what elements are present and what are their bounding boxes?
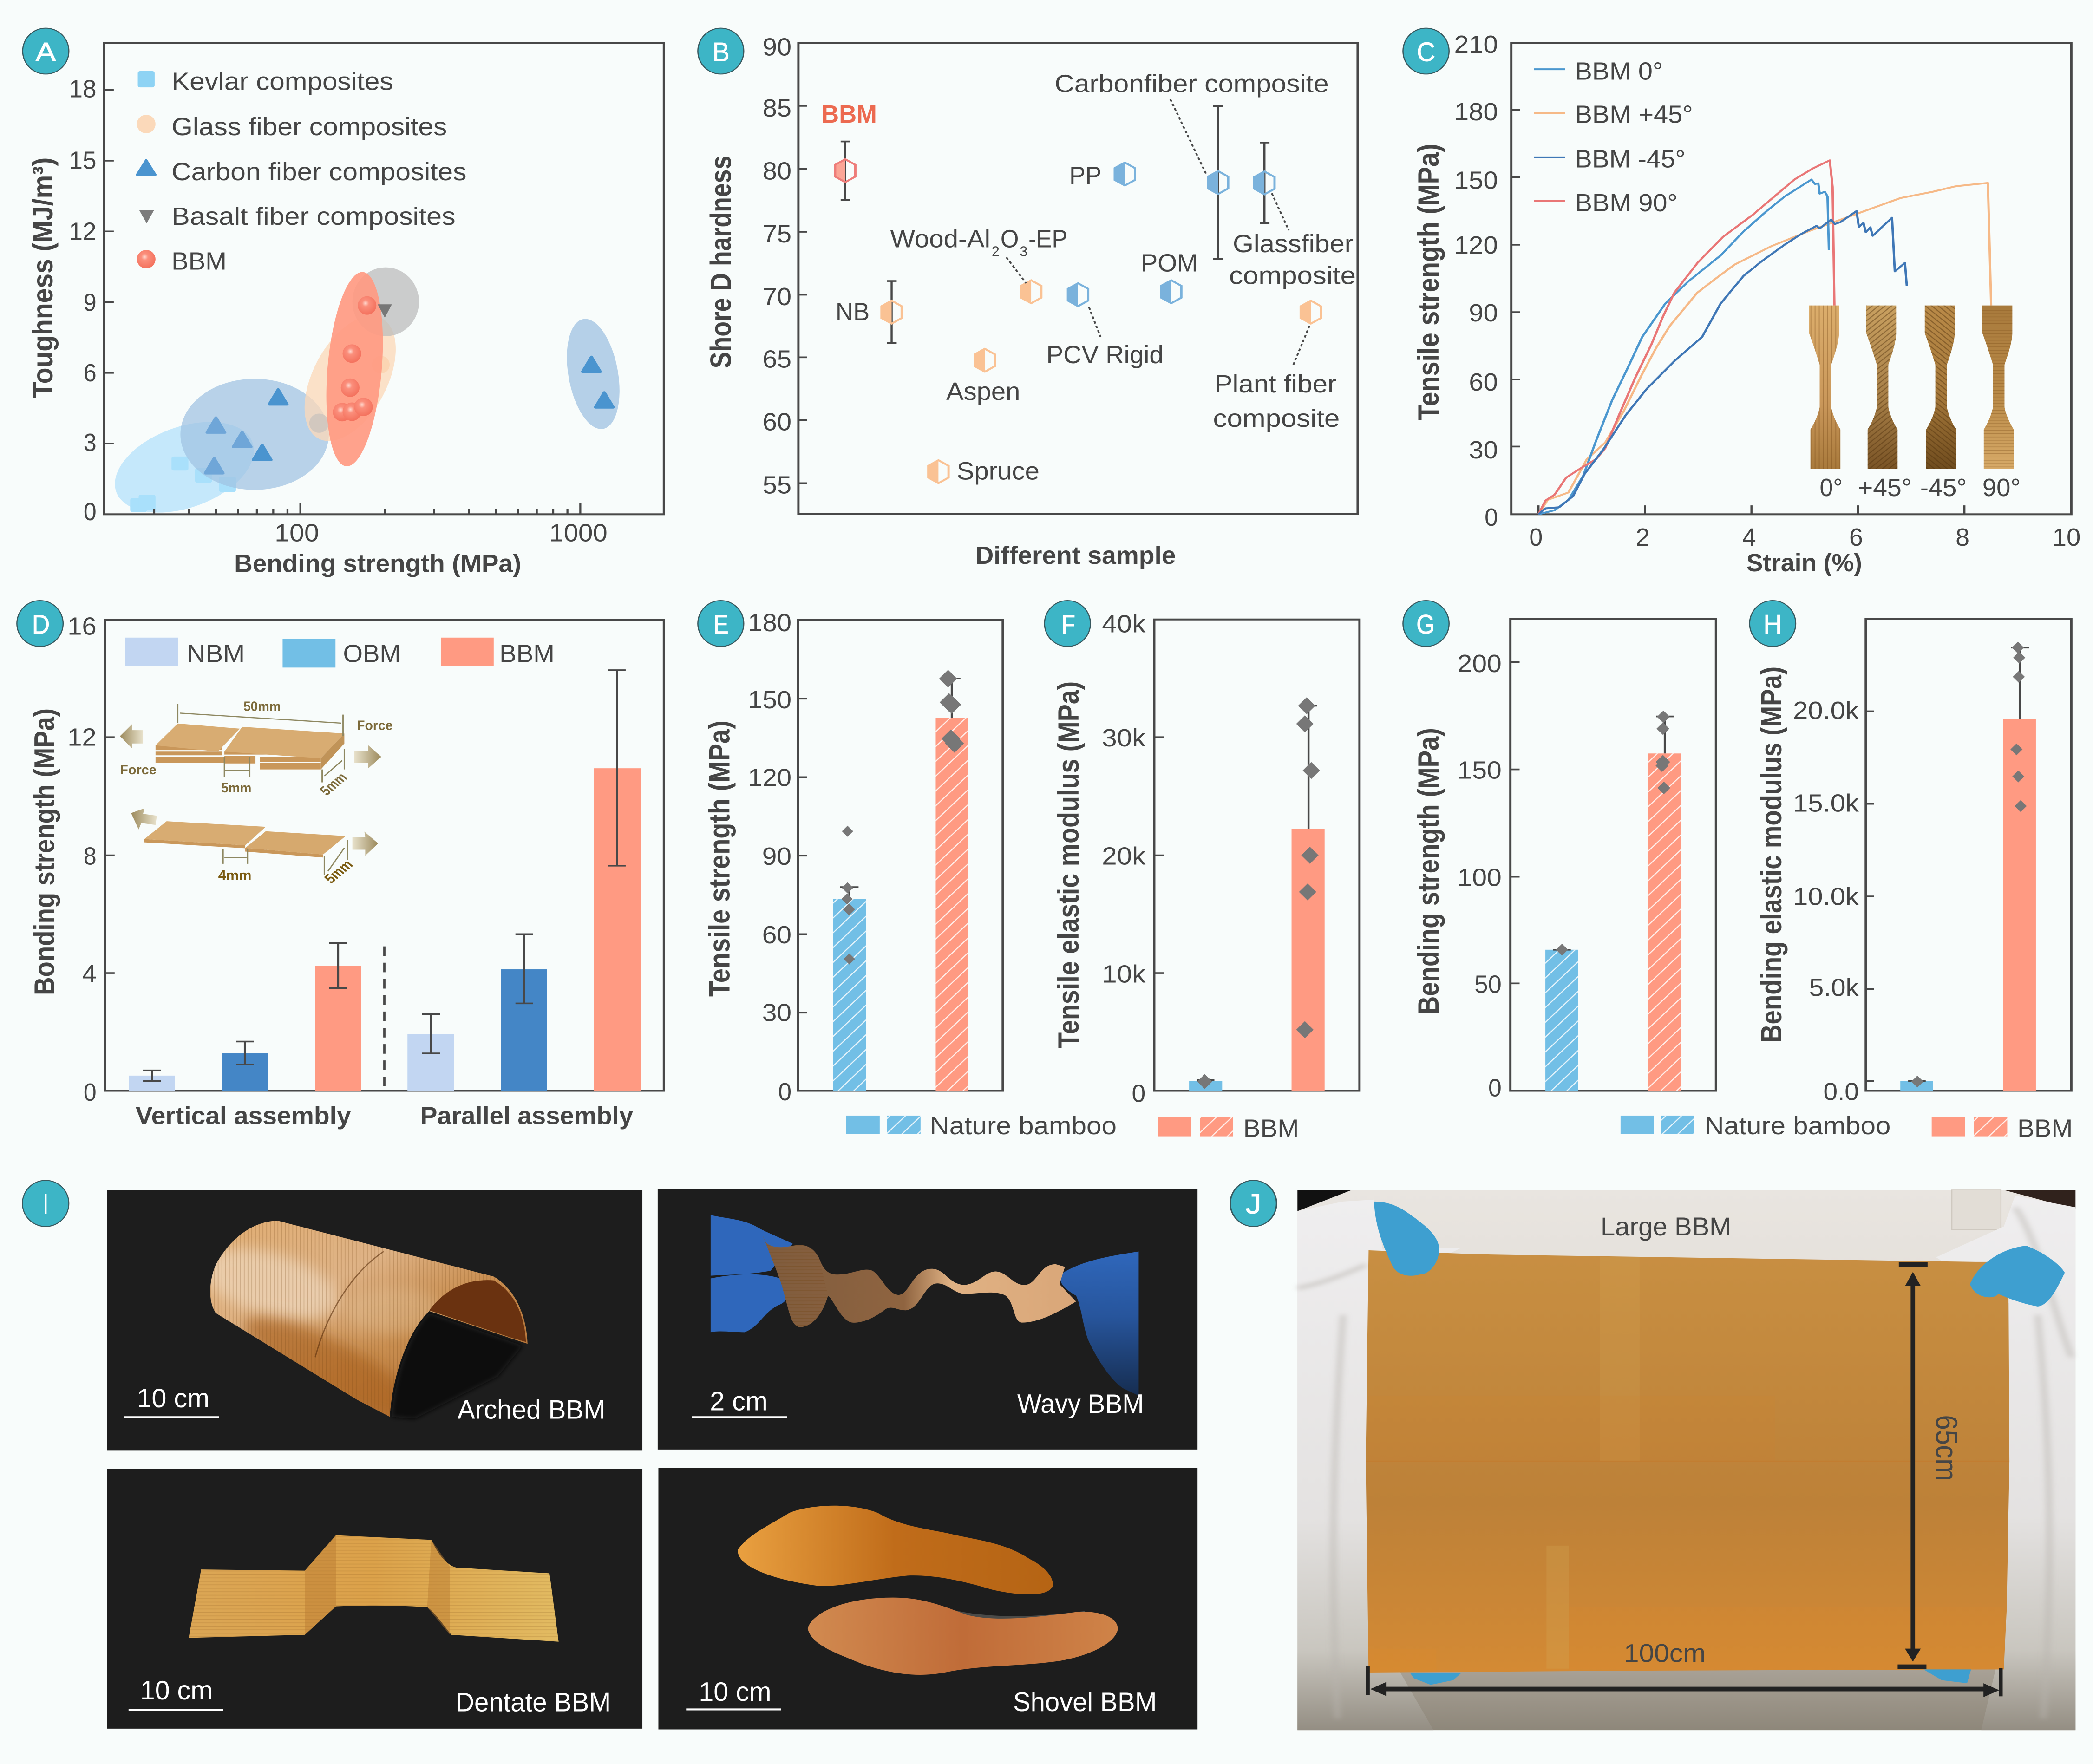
badge H: H <box>1763 609 1782 639</box>
legend: BBM -45° <box>1575 145 1686 173</box>
sample labels: 3 <box>1020 244 1027 260</box>
y tick labels: 10k <box>1102 960 1146 988</box>
badge J <box>1230 1180 1276 1227</box>
photo: wavy BBM <box>658 1189 1197 1450</box>
badge H <box>1750 601 1796 647</box>
x tick labels: 6 <box>1849 523 1863 551</box>
sample labels: BBM <box>821 100 877 128</box>
panel D: bonding strength <box>17 601 664 1130</box>
legend: BBM 90° <box>1575 189 1678 217</box>
y tick labels: 8 <box>84 842 97 870</box>
axes frame <box>105 620 664 1091</box>
error bars <box>1553 717 1674 950</box>
y tick labels: 120 <box>1454 231 1498 259</box>
badge G: G <box>1416 609 1435 639</box>
photo background with lab coats <box>1297 1190 2075 1730</box>
panel B: Shore D hardness <box>698 28 1358 569</box>
y tick labels <box>1793 696 1859 1105</box>
bamboo sheet <box>1366 1250 2009 1673</box>
inset: single layer joint diagram: 4mm <box>218 868 251 882</box>
y tick labels: 5.0k <box>1809 973 1859 1001</box>
label: large BBM: Large BBM <box>1601 1212 1731 1241</box>
curve: BBM 90 <box>1538 160 1834 514</box>
sample labels: -EP <box>1028 225 1067 253</box>
error bars <box>841 106 1269 343</box>
legend: BBM <box>499 640 555 667</box>
y tick labels: 15.0k <box>1793 789 1859 817</box>
error bars <box>1197 706 1317 1080</box>
legend for panels E and F: Nature bamboo <box>930 1112 1117 1139</box>
curve: BBM 0 <box>1538 180 1829 514</box>
label: wavy BBM: Wavy BBM <box>1017 1389 1144 1419</box>
axes frame <box>1511 619 1716 1091</box>
axes frame <box>1154 620 1360 1091</box>
photo: dentate BBM <box>107 1469 642 1729</box>
y tick labels: 10.0k <box>1793 882 1859 910</box>
y tick labels: 80 <box>763 157 791 185</box>
specimen photos <box>1809 306 2014 469</box>
y tick labels: 180 <box>1454 98 1498 126</box>
y tick labels: 90 <box>762 843 791 870</box>
badge C <box>1403 28 1449 74</box>
legend: Carbon fiber composites <box>171 158 466 186</box>
y axis ticks <box>798 106 807 483</box>
data hexagons <box>835 159 1321 483</box>
y tick labels: 18 <box>69 75 97 103</box>
y tick labels: 0 <box>1485 503 1498 531</box>
scale bar: 2 cm: 2 cm <box>710 1386 768 1417</box>
y tick labels: 40k <box>1102 610 1146 638</box>
inset: laminated joint diagram: Force <box>120 762 157 777</box>
y tick labels: 3 <box>84 429 97 457</box>
label: 100cm: 100cm <box>1624 1639 1706 1668</box>
y axis title: Tensile elastic modulus (MPa) <box>1053 681 1085 1048</box>
axes frame <box>798 620 1003 1091</box>
data points <box>842 670 964 965</box>
label: shovel BBM: Shovel BBM <box>1013 1687 1157 1717</box>
axis ticks <box>1511 110 1964 514</box>
y axis ticks <box>1511 662 1520 983</box>
inset: single layer joint diagram: 5mm <box>320 857 356 886</box>
panel G: bending strength bars <box>1403 601 1716 1102</box>
y tick labels: 100 <box>1458 863 1502 891</box>
y tick labels: 150 <box>748 686 791 714</box>
y tick labels: 4 <box>82 960 97 988</box>
legend: NBM <box>187 640 245 667</box>
data points <box>1911 642 2027 1087</box>
y tick labels: 150 <box>1454 166 1498 194</box>
group labels: Vertical assembly <box>136 1102 351 1130</box>
y tick labels: 30 <box>1469 436 1498 464</box>
y axis title: Bending strength (MPa) <box>1413 728 1445 1014</box>
y tick labels <box>748 609 791 1106</box>
curve: BBM +45 <box>1538 183 1991 514</box>
legend: BBM +45° <box>1575 100 1693 128</box>
y tick labels: 90 <box>1469 299 1498 327</box>
legend <box>125 638 555 667</box>
photo: shovel BBM <box>658 1468 1197 1730</box>
inset: single layer joint diagram <box>131 808 378 886</box>
y tick labels: 0.0 <box>1823 1078 1859 1105</box>
material ellipses and data points <box>96 268 627 531</box>
y tick labels: 60 <box>1469 368 1498 396</box>
y tick labels: 20.0k <box>1793 696 1859 725</box>
sample labels: POM <box>1141 249 1198 277</box>
y axis ticks <box>105 737 115 973</box>
sample labels <box>821 70 1356 485</box>
specimen labels <box>1820 474 2021 502</box>
badge I <box>22 1180 69 1227</box>
panel H: bending elastic modulus bars <box>1750 601 2071 1105</box>
panel I: wavy and shovel photos <box>658 1189 1197 1730</box>
y tick labels: 65 <box>763 346 791 373</box>
specimen labels: 0° <box>1820 474 1843 502</box>
y tick labels <box>67 612 97 1106</box>
y tick labels: 200 <box>1458 649 1502 677</box>
y tick labels: 15 <box>69 147 97 174</box>
legend: Kevlar composites <box>171 68 393 95</box>
legend: Glass fiber composites <box>171 113 447 141</box>
group labels: Parallel assembly <box>420 1102 633 1130</box>
y axis title: Bending elastic modulus (MPa) <box>1755 666 1788 1043</box>
panel A: toughness vs bending strength <box>23 28 664 577</box>
y tick labels: 20k <box>1102 843 1146 870</box>
y tick labels: 30 <box>762 999 791 1026</box>
sample labels: Spruce <box>957 457 1040 485</box>
y tick labels: 16 <box>67 612 97 640</box>
x tick labels: 2 <box>1636 523 1649 551</box>
group labels <box>136 1102 633 1130</box>
sample labels: composite <box>1213 405 1340 432</box>
dimension arrow: 100cm <box>1366 1666 2003 1697</box>
y tick labels: 0 <box>84 498 97 526</box>
panel E: tensile strength bars <box>698 601 1003 1106</box>
sample labels: PP <box>1069 162 1101 189</box>
badge B: B <box>713 37 730 67</box>
curve: BBM -45 <box>1538 211 1907 514</box>
y tick labels: 30k <box>1102 724 1146 752</box>
x tick labels: 100 <box>275 519 319 547</box>
y axis title: Tensile strength (MPa) <box>703 720 736 997</box>
x tick labels <box>1529 523 2080 551</box>
badge E: E <box>713 609 729 639</box>
y tick labels: 0 <box>1132 1080 1145 1107</box>
dashed separator <box>383 947 386 1091</box>
y axis title: Toughness (MJ/m³) <box>26 157 59 398</box>
x axis title: Different sample <box>975 542 1176 569</box>
hatched bars <box>833 718 968 1091</box>
y tick labels: 120 <box>748 764 791 791</box>
bars <box>129 768 641 1091</box>
data points <box>1556 711 1670 956</box>
error bars <box>143 670 626 1081</box>
y axis title: Bonding strength (MPa) <box>28 708 60 995</box>
scale bar: 10 cm: 10 cm <box>140 1675 213 1705</box>
error bars <box>1908 647 2029 1081</box>
y tick labels <box>69 75 97 526</box>
label: 65cm: 65cm <box>1929 1415 1964 1481</box>
panel C: tensile stress-strain curves <box>1403 28 2080 577</box>
y tick labels: 0 <box>778 1078 791 1106</box>
axes frame <box>1866 619 2071 1091</box>
bars <box>1189 829 1325 1091</box>
legend for panels E and F: BBM <box>1243 1114 1299 1142</box>
legend: BBM <box>171 247 227 275</box>
leader lines <box>1007 99 1309 365</box>
x tick labels: 0 <box>1529 523 1543 551</box>
dimension arrow: 65cm <box>1897 1262 1928 1669</box>
y tick labels: 6 <box>84 359 97 387</box>
sample labels: Wood-Al <box>890 225 990 253</box>
legend for panels G and H: Nature bamboo <box>1704 1111 1890 1139</box>
label: arched BBM: Arched BBM <box>458 1394 606 1424</box>
legend <box>137 68 466 275</box>
inset: laminated joint diagram: Force <box>357 718 393 733</box>
specimen labels: +45° <box>1858 474 1912 502</box>
x axis title: Strain (%) <box>1746 549 1862 577</box>
y tick labels: 150 <box>1458 756 1502 784</box>
sample labels: Carbonfiber composite <box>1054 70 1329 98</box>
inset: laminated joint diagram <box>120 699 393 798</box>
y tick labels: 70 <box>763 283 791 310</box>
specimen labels: 90° <box>1982 474 2021 502</box>
badge F: F <box>1061 609 1075 639</box>
sample labels: O <box>1001 225 1019 253</box>
badge E <box>698 601 744 647</box>
panel I: arched and dentate photos <box>22 1180 642 1729</box>
y tick labels: 90 <box>763 33 791 61</box>
panel J: large BBM photo <box>1230 1180 2075 1730</box>
x tick labels: 4 <box>1742 523 1756 551</box>
badge G <box>1403 601 1449 647</box>
gloves <box>1374 1202 2065 1685</box>
y tick labels: 12 <box>67 724 97 751</box>
x axis title: Bending strength (MPa) <box>234 550 521 577</box>
label: dentate BBM: Dentate BBM <box>455 1687 611 1717</box>
photo: arched BBM <box>107 1190 642 1450</box>
bars <box>1900 719 2036 1091</box>
y tick labels <box>763 33 791 499</box>
x tick labels: 10 <box>2053 523 2080 551</box>
y axis ticks <box>1866 711 1874 1081</box>
y tick labels <box>1454 30 1498 531</box>
badge C: C <box>1417 37 1435 67</box>
y tick labels <box>1458 649 1502 1102</box>
badge A <box>23 28 69 74</box>
legend: OBM <box>343 640 401 667</box>
sample labels: PCV Rigid <box>1046 341 1164 369</box>
badge B <box>698 28 744 74</box>
y tick labels: 75 <box>763 220 791 248</box>
sample labels: 2 <box>992 244 1000 260</box>
panel F: tensile elastic modulus bars <box>1045 601 1360 1107</box>
legend <box>1534 57 1693 217</box>
y axis title: Shore D hardness <box>705 156 738 368</box>
y tick labels <box>1102 610 1146 1107</box>
x axis ticks <box>154 503 580 514</box>
y axis title: Tensile strength (MPa) <box>1413 144 1445 420</box>
y tick labels: 50 <box>1474 970 1502 998</box>
axes frame <box>104 43 664 514</box>
legend: BBM 0° <box>1575 57 1663 85</box>
y axis ticks <box>798 699 807 1013</box>
scale bar: 10 cm: 10 cm <box>137 1383 209 1413</box>
y axis ticks <box>1154 737 1164 973</box>
y tick labels: 85 <box>763 94 791 122</box>
badge I: I <box>43 1189 48 1220</box>
scale bar: 10 cm: 10 cm <box>699 1677 772 1707</box>
error bars <box>840 679 961 899</box>
sample labels: NB <box>836 298 870 326</box>
data points <box>1197 697 1320 1089</box>
badge D: D <box>32 610 50 640</box>
y tick labels: 0 <box>1488 1074 1502 1102</box>
badge D <box>17 601 63 647</box>
x tick labels <box>275 519 608 547</box>
y tick labels: 180 <box>748 609 791 637</box>
x tick labels: 8 <box>1956 523 1969 551</box>
legend for panels G and H: BBM <box>2017 1114 2073 1142</box>
y axis ticks <box>104 90 114 444</box>
badge J: J <box>1245 1188 1261 1219</box>
x tick labels: 1000 <box>549 519 608 547</box>
axes frame <box>1511 43 2071 514</box>
y tick labels: 60 <box>763 408 791 436</box>
inset: laminated joint diagram: 50mm <box>243 699 281 714</box>
sample labels: Glassfiber <box>1233 230 1354 257</box>
y tick labels: 9 <box>84 289 97 316</box>
badge F <box>1045 601 1091 647</box>
sample labels: Aspen <box>946 378 1020 405</box>
specimen labels: -45° <box>1920 474 1967 502</box>
y tick labels: 12 <box>69 218 97 245</box>
inset: laminated joint diagram: 5mm <box>221 780 251 795</box>
inset: laminated joint diagram: 5mm <box>316 770 350 798</box>
y tick labels: 0 <box>84 1078 97 1106</box>
legend for panels G and H <box>1621 1111 2073 1142</box>
axes frame <box>798 43 1358 514</box>
sample labels: Plant fiber <box>1214 370 1336 398</box>
y tick labels: 55 <box>763 471 791 499</box>
y tick labels: 210 <box>1454 30 1498 59</box>
legend for panels E and F <box>846 1112 1299 1142</box>
badge A: A <box>36 38 56 67</box>
y tick labels: 60 <box>762 921 791 949</box>
sample labels: composite <box>1229 262 1356 289</box>
hatched bars <box>1545 753 1681 1091</box>
legend: Basalt fiber composites <box>171 203 456 230</box>
